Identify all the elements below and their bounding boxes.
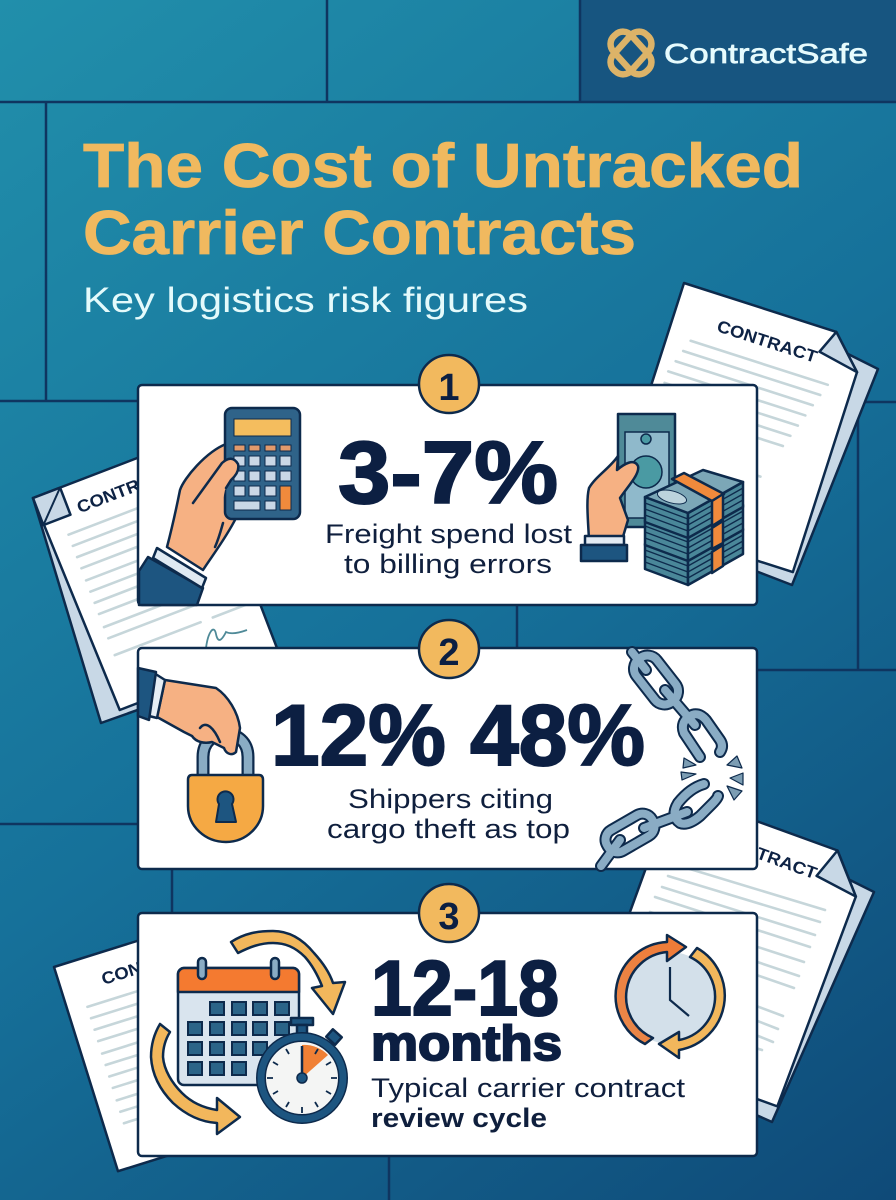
title bbox=[83, 132, 803, 268]
stat description bbox=[325, 519, 573, 579]
stat value bbox=[371, 944, 562, 1071]
logo panel bbox=[580, 0, 896, 103]
brand name: ContractSafe bbox=[664, 38, 868, 69]
badge 2: 2 bbox=[438, 632, 460, 674]
panel: card 3 bbox=[138, 884, 757, 1156]
stat description: to billing errors bbox=[344, 549, 552, 579]
stat description: review cycle bbox=[371, 1103, 547, 1133]
document: left contract bbox=[33, 436, 278, 723]
icon: calendar with stopwatch and arrows bbox=[151, 931, 345, 1134]
stat description: Freight spend lost bbox=[325, 519, 573, 549]
stat description: Shippers citing bbox=[348, 784, 553, 814]
stat description: Typical carrier contract bbox=[371, 1073, 686, 1103]
stat description bbox=[327, 784, 570, 844]
title: The Cost of Untracked bbox=[83, 132, 803, 201]
stat value: months bbox=[371, 1017, 562, 1071]
badge 3 bbox=[419, 884, 479, 942]
panel: card 2 bbox=[138, 620, 757, 869]
document: left contract: CONTRACT bbox=[74, 462, 179, 517]
subtitle: Key logistics risk figures bbox=[83, 281, 528, 320]
badge 3: 3 bbox=[438, 896, 460, 938]
logo bbox=[606, 27, 868, 79]
badge 2 bbox=[419, 620, 479, 678]
document: top right contract bbox=[610, 283, 878, 585]
icon: hand holding padlock bbox=[138, 668, 263, 842]
document: top right contract: CONTRACT bbox=[715, 317, 820, 367]
badge 1: 1 bbox=[438, 367, 460, 409]
stat value: 3-7% bbox=[338, 423, 558, 522]
icon: hand holding calculator bbox=[139, 408, 300, 605]
signature bbox=[206, 630, 247, 648]
document: lower right contract bbox=[585, 791, 874, 1122]
icon: hand with cash stack bbox=[581, 414, 743, 585]
badge 1 bbox=[419, 355, 479, 413]
stat value: 12% 48% bbox=[271, 688, 645, 784]
document: lower right contract: CONTRACT bbox=[715, 830, 820, 883]
panel: card 1 bbox=[138, 355, 757, 605]
icon: interlocked logo mark bbox=[606, 27, 656, 79]
document: lower left contract bbox=[54, 916, 280, 1171]
document: lower left contract: CONTRACT bbox=[99, 939, 205, 989]
stat description bbox=[371, 1073, 686, 1133]
icon: clock with cycle arrows bbox=[616, 935, 725, 1058]
icon: broken chain bbox=[601, 651, 743, 866]
title: Carrier Contracts bbox=[83, 199, 636, 268]
stat description: cargo theft as top bbox=[327, 814, 570, 844]
stat value: 12-18 bbox=[371, 944, 559, 1032]
